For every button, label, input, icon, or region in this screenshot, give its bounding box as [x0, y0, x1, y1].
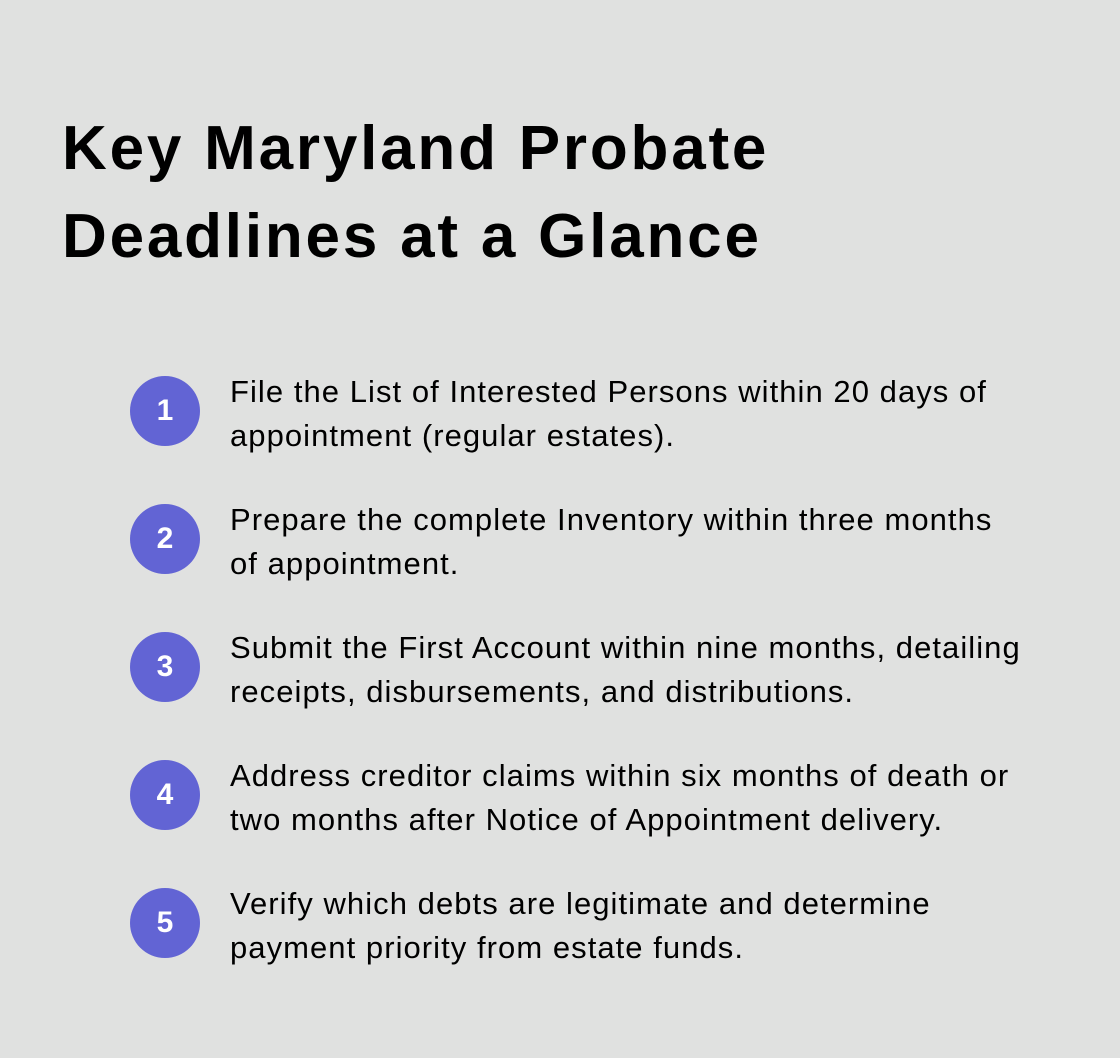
item 5	[130, 886, 931, 965]
item 3: 3	[157, 650, 173, 683]
item 3: receipts, disbursements, and distributions.	[230, 674, 854, 709]
item 1: 1	[157, 394, 173, 427]
item 2: Prepare the complete Inventory within three months	[230, 502, 992, 537]
item 3: Submit the First Account within nine months, detailing	[230, 630, 1021, 665]
item 2: of appointment.	[230, 546, 459, 581]
item 3	[130, 630, 1021, 709]
item 4: 4	[157, 778, 173, 811]
item 5: payment priority from estate funds.	[230, 930, 744, 965]
item 4: Address creditor claims within six months of death or	[230, 758, 1009, 793]
item 4	[130, 758, 1009, 837]
item 1: appointment (regular estates).	[230, 418, 675, 453]
item 2	[130, 502, 992, 581]
item 1: File the List of Interested Persons within 20 days of	[230, 374, 987, 409]
title: Key Maryland Probate	[62, 114, 769, 183]
item 2: 2	[157, 522, 173, 555]
title: Deadlines at a Glance	[62, 202, 762, 271]
item 4: two months after Notice of Appointment delivery.	[230, 802, 943, 837]
item 1	[130, 374, 987, 453]
item 5: 5	[157, 906, 173, 939]
item 5: Verify which debts are legitimate and determine	[230, 886, 931, 921]
title	[62, 114, 769, 271]
